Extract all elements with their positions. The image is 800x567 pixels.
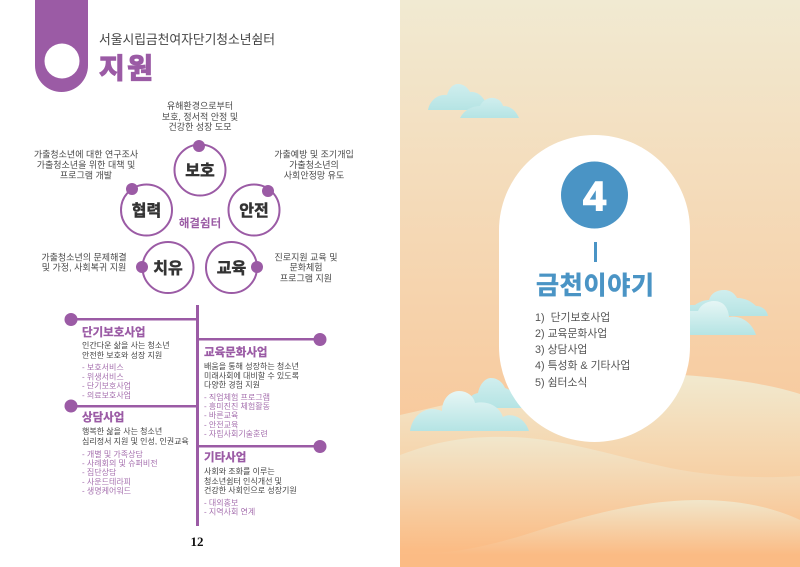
subtitle: 서울시립금천여자단기청소년쉼터 [99, 32, 275, 47]
section: 기타사업 [204, 450, 297, 516]
circle: 안전 [228, 184, 280, 236]
section: 교육문화사업: - 자립사회기술훈련 [204, 428, 268, 438]
section: 단기보호사업: - 보호서비스 [82, 363, 124, 372]
section: 교육문화사업: 다양한 경험 지원 [204, 380, 260, 390]
text: 안전 description [274, 148, 354, 180]
section: 교육문화사업 [204, 345, 299, 438]
circle: 치유 [136, 242, 194, 293]
section: 기타사업: 사회와 조화를 이루는 [204, 466, 275, 476]
contents list: 1) 단기보호사업 [535, 311, 610, 324]
circle: 협력 [121, 183, 172, 236]
section: 교육문화사업: 교육문화사업 [204, 345, 267, 359]
text: 협력 description: 가출청소년을 위한 대책 및 [37, 159, 135, 170]
section heading: 금천이야기 [536, 272, 654, 300]
cloud: right front [680, 301, 756, 335]
section: 상담사업: - 개별 및 가족상담 [82, 449, 143, 459]
heading: 지원 [99, 53, 153, 84]
cloud: top front [460, 98, 519, 118]
text: 교육 description [275, 252, 337, 284]
text: 치유 description: 및 가정, 사회복귀 지원 [42, 262, 126, 272]
dune: front [400, 500, 800, 567]
section: 교육문화사업: - 바른교육 [204, 410, 238, 420]
panel: left page [0, 0, 400, 567]
text: 협력 description: 프로그램 개발 [60, 170, 112, 180]
contents list: 3) 상담사업 [535, 343, 587, 356]
text: 안전 description: 가출청소년의 [289, 160, 339, 170]
section: 기타사업: 기타사업 [204, 450, 246, 464]
section: 상담사업: - 사운드테라피 [82, 478, 131, 486]
circle: 보호 [174, 140, 226, 196]
text: 교육 description: 진로지원 교육 및 [275, 252, 337, 262]
diagram: 해결쉼터 circles [121, 140, 280, 293]
panel: right page illustration [400, 0, 800, 567]
section: 교육문화사업: - 직업체험 프로그램 [204, 392, 270, 402]
section: 상담사업 [82, 411, 189, 496]
text: 안전 description: 사회안정망 유도 [284, 170, 344, 180]
divider bar [594, 242, 597, 262]
contents list: 2) 교육문화사업 [535, 327, 607, 340]
circle: 협력: 협력 [132, 202, 161, 220]
circle: 교육: 교육 [217, 260, 246, 278]
section: 교육문화사업: - 안전교육 [204, 420, 238, 430]
section: 기타사업: 건강한 사회인으로 성장기원 [204, 485, 297, 495]
section: 단기보호사업: - 단기보호사업 [82, 380, 131, 390]
section: 상담사업: - 사례회의 및 슈퍼비전 [82, 458, 158, 468]
cloud: lower front [410, 391, 529, 431]
section: 상담사업: 심리정서 지원 및 인성, 인권교육 [82, 436, 189, 446]
section: 교육문화사업: 미래사회에 대비할 수 있도록 [204, 370, 299, 380]
dune: back [400, 374, 800, 567]
contents list: 4) 특성화 & 기타사업 [535, 359, 630, 372]
section: 단기보호사업: - 의료보호사업 [82, 390, 131, 400]
section: 단기보호사업 [82, 325, 170, 400]
panel: white pill [499, 135, 690, 442]
text: 협력 description: 가출청소년에 대한 연구조사 [34, 150, 139, 160]
contents list [535, 311, 630, 389]
section: 상담사업: 행복한 삶을 사는 청소년 [82, 426, 162, 436]
text: 보호 description: 보호, 정서적 안정 및 [162, 111, 238, 122]
section: 단기보호사업: 안전한 보호와 성장 지원 [82, 350, 162, 360]
text: 치유 description [41, 252, 127, 272]
cloud: lower back [464, 378, 524, 408]
background sky [400, 0, 800, 567]
section: 기타사업: - 지역사회 연계 [204, 506, 255, 516]
center label: 해결쉼터 [179, 217, 221, 230]
section: 교육문화사업: - 흥미진진 체험활동 [204, 401, 270, 411]
circle: 안전: 안전 [239, 202, 269, 220]
section: 교육문화사업: 배움을 통해 성장하는 청소년 [204, 361, 299, 371]
section: 상담사업: - 생명케어워드 [82, 486, 131, 496]
page number: 12 [190, 534, 204, 549]
cloud: top back [428, 84, 488, 110]
text: 치유 description: 가출청소년의 문제해결 [41, 252, 127, 262]
section: 상담사업: - 집단상담 [82, 467, 117, 477]
text: 안전 description: 가출예방 및 조기개입 [274, 148, 354, 160]
badge: number 4 [561, 162, 628, 228]
text: 보호 description: 건강한 성장 도모 [169, 122, 231, 132]
timeline: spine and branches [64, 305, 326, 526]
dune: middle [400, 437, 800, 567]
circle: 교육 [206, 242, 263, 293]
section: 단기보호사업: 인간다운 삶을 사는 청소년 [82, 340, 170, 350]
contents list: 5) 쉼터소식 [535, 376, 587, 389]
badge: number 4: 4 [583, 173, 606, 219]
text: 보호 description [162, 100, 238, 132]
icon: purple bookmark tab [35, 0, 88, 92]
text: 교육 description: 문화체험 [289, 262, 323, 272]
text: 보호 description: 유해환경으로부터 [167, 100, 233, 111]
section: 기타사업: - 대외홍보 [204, 498, 238, 508]
text: 교육 description: 프로그램 지원 [280, 272, 332, 284]
section: 단기보호사업: - 위생서비스 [82, 372, 124, 382]
circle: 치유: 치유 [153, 260, 183, 278]
cloud: right back [680, 290, 768, 316]
section: 상담사업: 상담사업 [82, 411, 124, 424]
section: 단기보호사업: 단기보호사업 [82, 325, 145, 339]
text: 협력 description [34, 150, 139, 180]
section: 기타사업: 청소년쉼터 인식개선 및 [204, 476, 282, 486]
circle: 보호: 보호 [185, 162, 215, 180]
